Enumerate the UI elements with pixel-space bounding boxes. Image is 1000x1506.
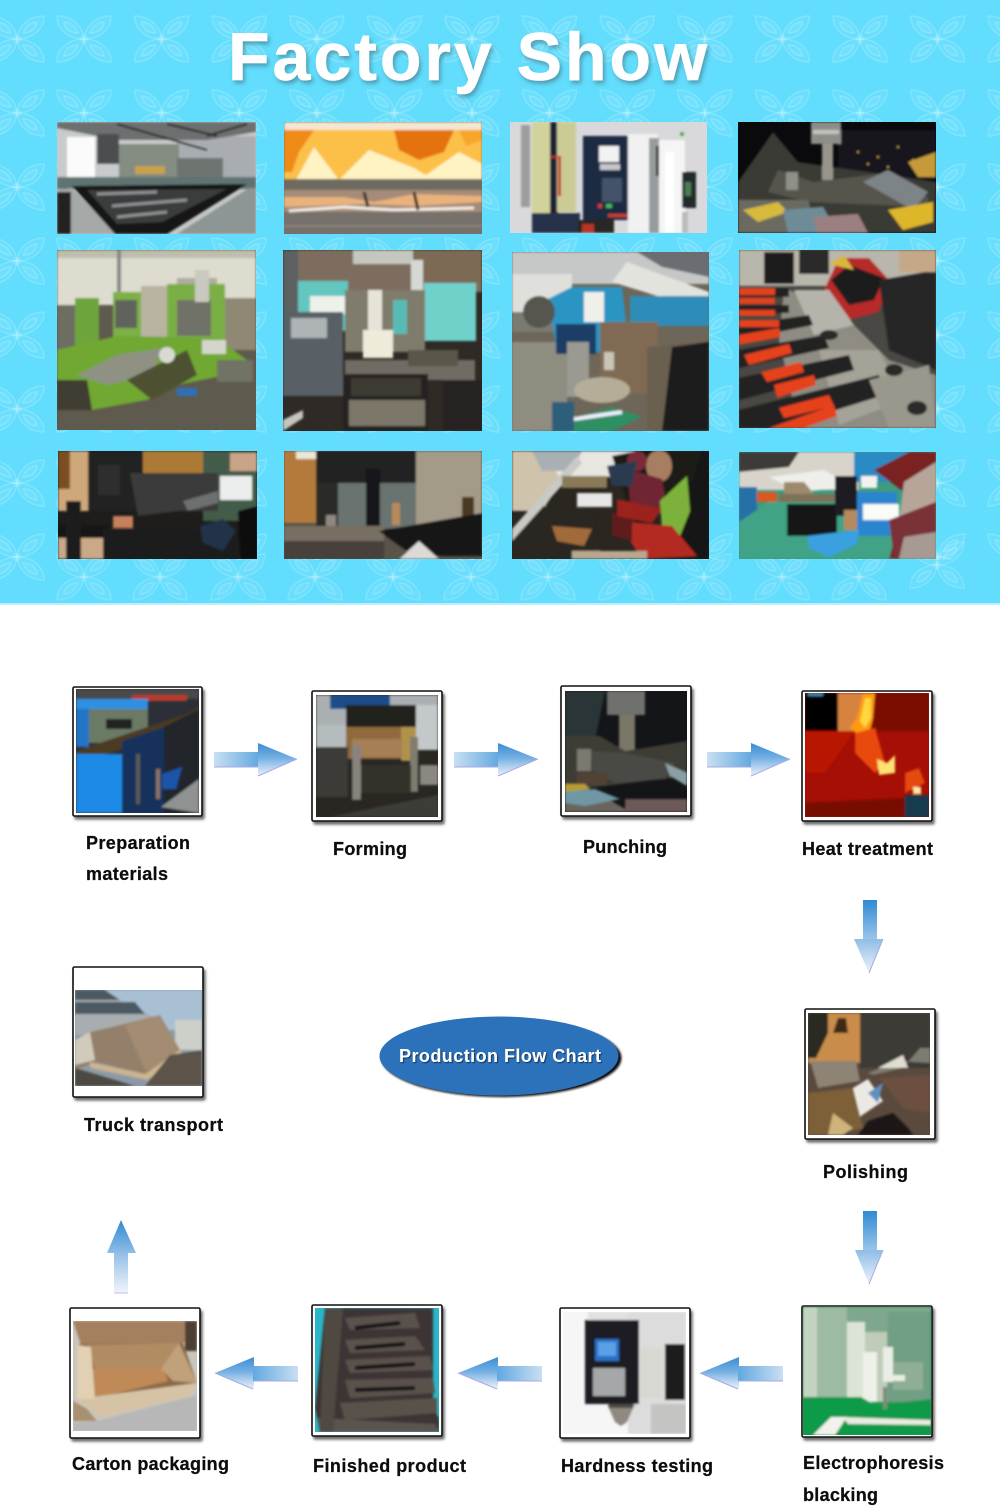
panel: factory show background — [0, 0, 1000, 605]
photo: finished tools — [315, 1308, 439, 1432]
label: punching: Punching — [583, 837, 667, 857]
photo: punching die — [284, 451, 482, 559]
label: truck transport: Truck transport — [84, 1115, 223, 1135]
photo: blue drill press — [512, 252, 709, 431]
photo: polishing — [808, 1013, 930, 1135]
photo: furnace line with tray — [57, 122, 256, 234]
arrow: right 3 — [707, 743, 790, 776]
card: punching — [561, 686, 691, 816]
card: heat treatment — [802, 691, 932, 821]
photo: press operator — [58, 451, 257, 559]
arrow: down 2 — [855, 1211, 883, 1284]
photo: heat treatment — [805, 693, 929, 817]
photo: green workbench — [739, 452, 936, 559]
label: polishing: Polishing — [823, 1162, 908, 1182]
photo: forming press — [316, 695, 438, 817]
card: carton packaging — [70, 1308, 200, 1438]
label: heat treatment: Heat treatment — [802, 839, 933, 859]
label: finished product: Finished product — [313, 1456, 466, 1476]
card: truck transport — [73, 967, 203, 1097]
title: Factory Show — [228, 19, 708, 95]
photo: milling spindle — [738, 122, 936, 233]
photo: truck with cartons — [75, 990, 202, 1086]
photo: green milling machine — [57, 250, 256, 430]
arrow: left 3 — [215, 1357, 298, 1389]
photo: flames over parts — [284, 122, 482, 234]
card: preparation materials — [73, 687, 202, 816]
label: forming: Forming — [333, 839, 407, 859]
arrow: left 2 — [458, 1357, 542, 1389]
label: preparation materials: materials — [86, 864, 168, 884]
photo: hardness tester — [563, 1312, 686, 1434]
photo: blue machine — [76, 689, 199, 813]
badge text: Production Flow Chart — [399, 1046, 601, 1066]
photo: CNC machine panel — [510, 122, 707, 233]
arrow: down 1 — [854, 900, 883, 973]
photo: red handled tools on line — [739, 250, 936, 428]
arrow: up — [107, 1220, 136, 1293]
card: electrophoresis blacking — [802, 1306, 932, 1437]
card: hardness testing — [560, 1308, 690, 1438]
arrow: right 1 — [214, 743, 297, 776]
card: polishing — [805, 1009, 935, 1139]
label: electrophoresis blacking: blacking — [803, 1485, 878, 1505]
photo: open carton — [73, 1321, 197, 1431]
photo: clean room — [803, 1307, 931, 1435]
photo: teal band saw — [283, 250, 482, 431]
card: forming — [312, 691, 442, 821]
label: carton packaging: Carton packaging — [72, 1454, 229, 1474]
label: hardness testing: Hardness testing — [561, 1456, 713, 1476]
badge: production flow chart — [380, 1016, 622, 1097]
card: finished product — [312, 1305, 442, 1436]
arrow: left 1 — [700, 1357, 783, 1389]
photo: assembly workers — [512, 451, 709, 559]
panel: production flow chart — [70, 686, 944, 1505]
arrow: right 2 — [454, 743, 538, 776]
label: preparation materials: Preparation — [86, 833, 190, 853]
photo: punching spindle — [565, 691, 687, 812]
label: electrophoresis blacking: Electrophoresis — [803, 1453, 944, 1473]
